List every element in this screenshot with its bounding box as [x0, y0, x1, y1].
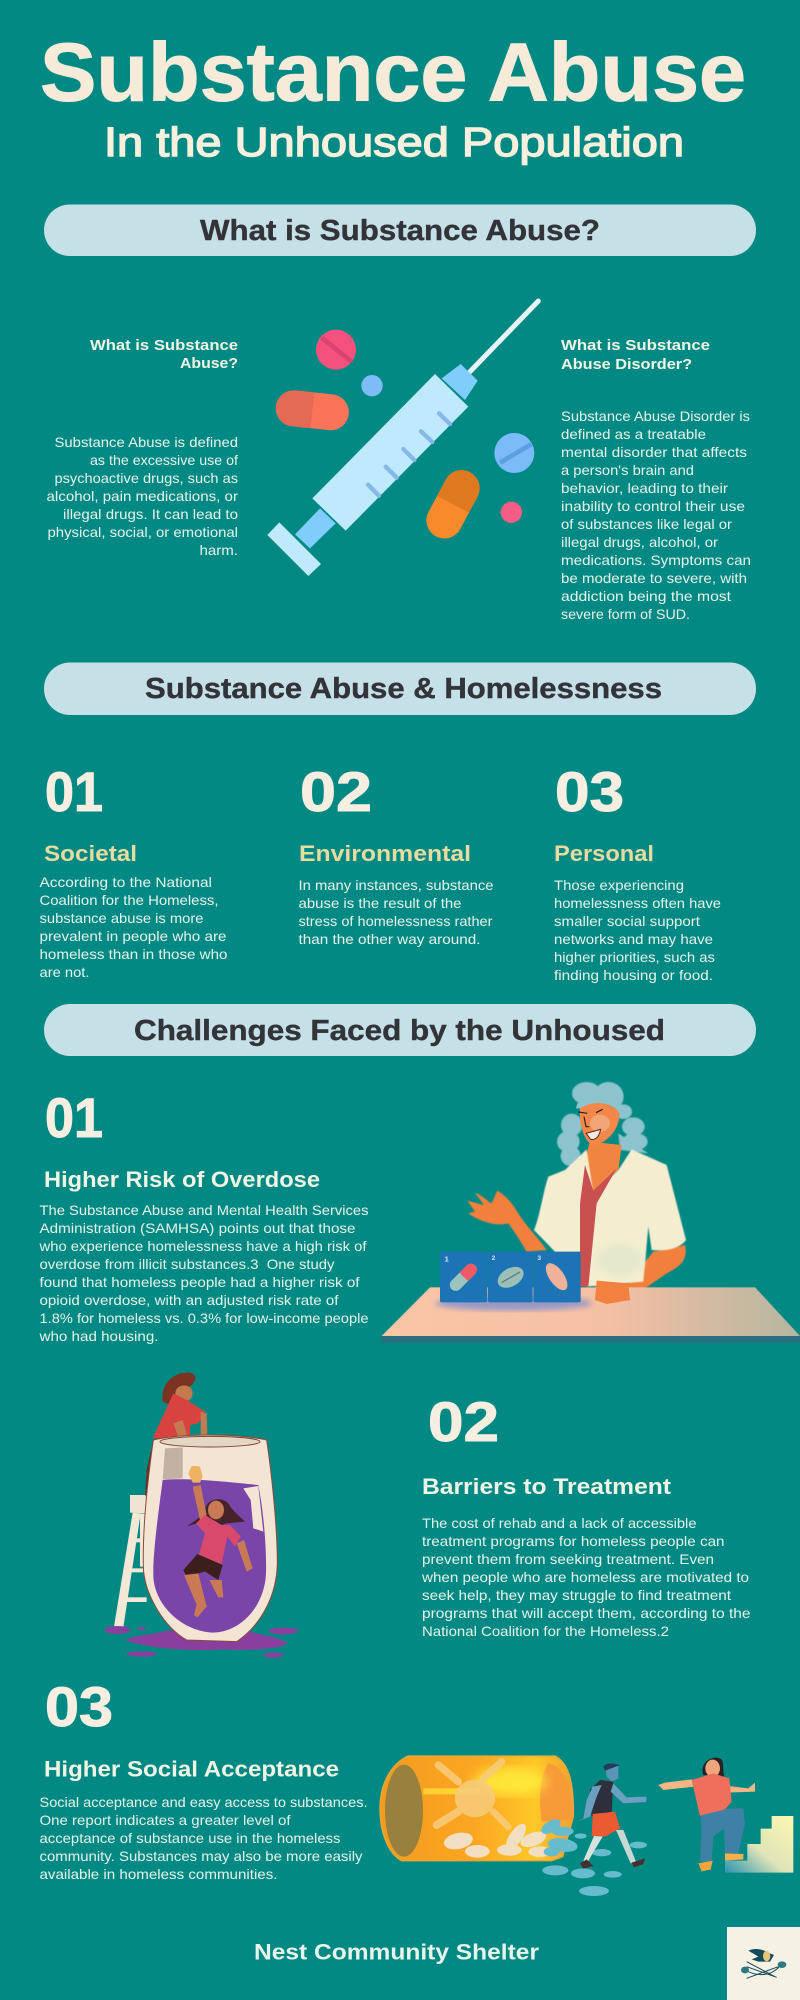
text block: What is Substance Abuse Disorder (right): a person's brain and — [561, 462, 694, 478]
column: Societal — [40, 760, 228, 980]
column: Personal: networks and may have — [554, 931, 713, 947]
challenge 01: Higher Risk of Overdose: opioid overdose, with an adjusted risk rate of — [40, 1292, 339, 1308]
icon: syringe and pills — [267, 301, 538, 576]
inner shade — [163, 1447, 183, 1479]
title: Substance Abuse — [40, 26, 746, 118]
top woman — [153, 1373, 207, 1460]
syringe hub — [442, 364, 478, 400]
needle — [470, 301, 538, 372]
column: Personal: 03 — [555, 760, 624, 823]
challenge 03: Higher Social Acceptance: community. Substances may also be more easily — [40, 1848, 362, 1864]
text block: What is Substance Abuse Disorder (right): mental disorder that affects — [561, 444, 747, 460]
table — [382, 1287, 800, 1336]
challenge 02: Barriers to Treatment — [421, 1390, 751, 1639]
walking man — [577, 1763, 647, 1869]
challenge 01: Higher Risk of Overdose: who had housing. — [38, 1328, 158, 1344]
text block: What is Substance Abuse Disorder (right): defined as a treatable — [561, 426, 706, 442]
column: Environmental: stress of homelessness rather — [298, 913, 493, 929]
column: Societal: Societal — [44, 841, 137, 866]
text block: What is Substance Abuse Disorder (right) — [561, 337, 751, 622]
text block: What is Substance Abuse (left): as the excessive use of — [90, 452, 238, 468]
hand on table — [595, 1281, 630, 1304]
pink tablet — [316, 330, 356, 370]
glass rim — [160, 1436, 260, 1447]
front arm and hand — [467, 1191, 547, 1252]
challenge 01: Higher Risk of Overdose: Administration (SAMHSA) points out that those — [40, 1220, 356, 1236]
logo: bird on nest — [727, 1927, 800, 2000]
barrel ticks — [368, 413, 450, 496]
illustration: woman reaching into a giant glass of purple liquid — [105, 1373, 298, 1658]
card 2: 2 — [492, 1255, 496, 1262]
plunger rod — [295, 508, 336, 548]
challenge 03: Higher Social Acceptance: available in homeless communities. — [40, 1866, 278, 1882]
subtitle: In the Unhoused Population — [104, 119, 684, 165]
column: Personal: homelessness often have — [554, 895, 721, 911]
footer: Nest Community Shelter: Nest Community Shelter — [254, 1940, 539, 1964]
woman with arms spread — [658, 1758, 755, 1871]
heading pill: Substance Abuse & Homelessness — [44, 662, 756, 715]
hair — [557, 1082, 648, 1166]
back arm — [595, 1245, 686, 1302]
red capsule — [274, 389, 351, 432]
column: Societal: prevalent in people who are — [40, 928, 227, 944]
column: Societal: Coalition for the Homeless, — [40, 892, 218, 908]
challenge 03: Higher Social Acceptance: 03 — [45, 1675, 113, 1738]
challenge 02: Barriers to Treatment: Barriers to Treatment — [422, 1474, 672, 1499]
column: Societal: 01 — [45, 760, 103, 823]
text block: What is Substance Abuse Disorder (right): addiction being the most — [561, 588, 731, 604]
challenge 02: Barriers to Treatment: seek help, they may struggle to find treatment — [422, 1587, 731, 1603]
text block: What is Substance Abuse Disorder (right): behavior, leading to their — [561, 480, 728, 496]
shirt — [534, 1149, 686, 1287]
column: Environmental: In many instances, substance — [298, 877, 494, 893]
card shadow — [435, 1296, 592, 1311]
spilled puddle — [105, 1626, 298, 1658]
heading pill: Challenges Faced by the Unhoused — [44, 1004, 756, 1056]
blue pills — [539, 1816, 647, 1896]
card 1 — [440, 1252, 487, 1302]
smile — [586, 1129, 601, 1139]
pill bottle — [380, 1756, 573, 1861]
column: Personal — [554, 760, 721, 983]
text block: What is Substance Abuse (left): psychoactive drugs, such as — [54, 470, 238, 486]
text block: What is Substance Abuse (left): harm. — [200, 542, 238, 558]
red top — [580, 1165, 617, 1287]
heading pill: Substance Abuse & Homelessness: Substance Abuse & Homelessness — [145, 673, 662, 705]
column: Societal: are not. — [40, 964, 90, 980]
column: Personal: smaller social support — [554, 913, 700, 929]
challenge 03: Higher Social Acceptance: Higher Social Acceptance — [44, 1756, 339, 1782]
text block: What is Substance Abuse (left): alcohol, pain medications, or — [46, 488, 238, 504]
text block: What is Substance Abuse (left) — [46, 337, 238, 558]
challenge 01: Higher Risk of Overdose: who experience homelessness have a high risk of — [38, 1238, 367, 1254]
face — [580, 1100, 619, 1146]
challenge 01: Higher Risk of Overdose — [38, 1086, 369, 1344]
column: Societal: According to the National — [40, 874, 212, 890]
top woman legs behind glass — [145, 1438, 158, 1497]
challenge 03: Higher Social Acceptance: One report indicates a greater level of — [40, 1812, 291, 1828]
facial features — [578, 1109, 603, 1127]
text block: What is Substance Abuse Disorder (right): be moderate to severe, with — [561, 570, 747, 586]
liquid highlight — [243, 1486, 263, 1532]
text block: What is Substance Abuse (left): illegal drugs. It can lead to — [63, 506, 238, 522]
column: Societal: substance abuse is more — [40, 910, 204, 926]
text block: What is Substance Abuse (left): Substance Abuse is defined — [54, 434, 238, 450]
challenge 02: Barriers to Treatment: National Coalition for the Homeless.2 — [422, 1623, 669, 1639]
illustration: pill bottle with people stepping on spilled pills — [380, 1756, 793, 1896]
challenge 03: Higher Social Acceptance — [40, 1675, 368, 1882]
bottle opening — [540, 1763, 573, 1822]
text block: What is Substance Abuse Disorder (right): medications. Symptoms can — [561, 552, 751, 568]
syringe barrel — [312, 374, 468, 531]
small blue dot — [361, 375, 383, 396]
card 2 — [488, 1252, 533, 1302]
text block: What is Substance Abuse Disorder (right): illegal drugs, alcohol, or — [561, 534, 718, 550]
challenge 02: Barriers to Treatment: treatment programs for homeless people can — [422, 1533, 724, 1549]
illustration: woman presenting pill cards at a table — [382, 1082, 800, 1343]
heading pill: Challenges Faced by the Unhoused: Challenges Faced by the Unhoused — [134, 1015, 665, 1047]
text block: What is Substance Abuse (left): physical, social, or emotional — [48, 524, 238, 540]
column: Personal: finding housing or food. — [554, 967, 713, 983]
heading pill: What is Substance Abuse? — [44, 204, 756, 256]
text block: What is Substance Abuse (left): What is Substance — [90, 337, 238, 354]
column: Societal: homeless than in those who — [40, 946, 228, 962]
text block: What is Substance Abuse Disorder (right): Substance Abuse Disorder is — [561, 408, 750, 424]
challenge 01: Higher Risk of Overdose: The Substance Abuse and Mental Health Services — [40, 1202, 368, 1218]
bottom woman — [183, 1466, 253, 1617]
challenge 02: Barriers to Treatment: programs that will accept them, according to the — [422, 1605, 751, 1621]
neck — [584, 1142, 622, 1192]
challenge 01: Higher Risk of Overdose: 1.8% for homeless vs. 0.3% for low-income people — [40, 1310, 369, 1326]
challenge 02: Barriers to Treatment: The cost of rehab and a lack of accessible — [422, 1515, 697, 1531]
text block: What is Substance Abuse Disorder (right): Abuse Disorder? — [561, 356, 692, 373]
purple liquid — [153, 1479, 266, 1633]
text block: What is Substance Abuse Disorder (right): inability to control their use — [561, 498, 745, 514]
orange capsule — [420, 464, 486, 545]
heading pill: What is Substance Abuse?: What is Substance Abuse? — [200, 215, 600, 247]
column: Personal: Personal — [554, 841, 654, 866]
challenge 02: Barriers to Treatment: 02 — [428, 1390, 499, 1453]
light streak — [473, 1768, 547, 1796]
card 3 — [533, 1252, 581, 1302]
card 3: 3 — [537, 1255, 541, 1262]
column: Environmental — [298, 760, 494, 947]
bottle base — [385, 1765, 423, 1857]
plunger head — [267, 522, 321, 576]
glass — [143, 1435, 277, 1642]
column: Personal: Those experiencing — [554, 877, 684, 893]
challenge 03: Higher Social Acceptance: Social acceptance and easy access to substances. — [40, 1794, 368, 1810]
stairs — [725, 1816, 793, 1873]
challenge 02: Barriers to Treatment: prevent them from seeking treatment. Even — [422, 1551, 714, 1567]
ladder — [114, 1495, 147, 1627]
text block: What is Substance Abuse (left): Abuse? — [180, 355, 238, 372]
shirt shading — [597, 1243, 643, 1277]
text block: What is Substance Abuse Disorder (right): What is Substance — [561, 337, 710, 354]
hair fringe — [576, 1092, 623, 1115]
column: Personal: higher priorities, such as — [554, 949, 715, 965]
text block: What is Substance Abuse Disorder (right): severe form of SUD. — [561, 606, 690, 622]
challenge 01: Higher Risk of Overdose: Higher Risk of Overdose — [44, 1167, 320, 1192]
challenge 01: Higher Risk of Overdose: found that homeless people had a higher risk of — [40, 1274, 360, 1290]
challenge 03: Higher Social Acceptance: acceptance of substance use in the homeless — [40, 1830, 340, 1846]
column: Environmental: abuse is the result of the — [298, 895, 462, 911]
challenge 01: Higher Risk of Overdose: 01 — [45, 1086, 103, 1149]
column: Environmental: Environmental — [299, 841, 471, 866]
challenge 01: Higher Risk of Overdose: overdose from illicit substances.3 One study — [40, 1256, 334, 1272]
text block: What is Substance Abuse Disorder (right): of substances like legal or — [561, 516, 732, 532]
challenge 02: Barriers to Treatment: when people who are homeless are motivated to — [421, 1569, 749, 1585]
blue tablet — [494, 433, 534, 473]
cream pills — [442, 1821, 552, 1858]
card 1: 1 — [445, 1254, 449, 1263]
small pink dot — [501, 502, 522, 523]
table edge — [382, 1336, 800, 1343]
column: Environmental: than the other way around. — [298, 931, 480, 947]
column: Environmental: 02 — [300, 760, 372, 823]
skull and bones — [437, 1762, 508, 1827]
